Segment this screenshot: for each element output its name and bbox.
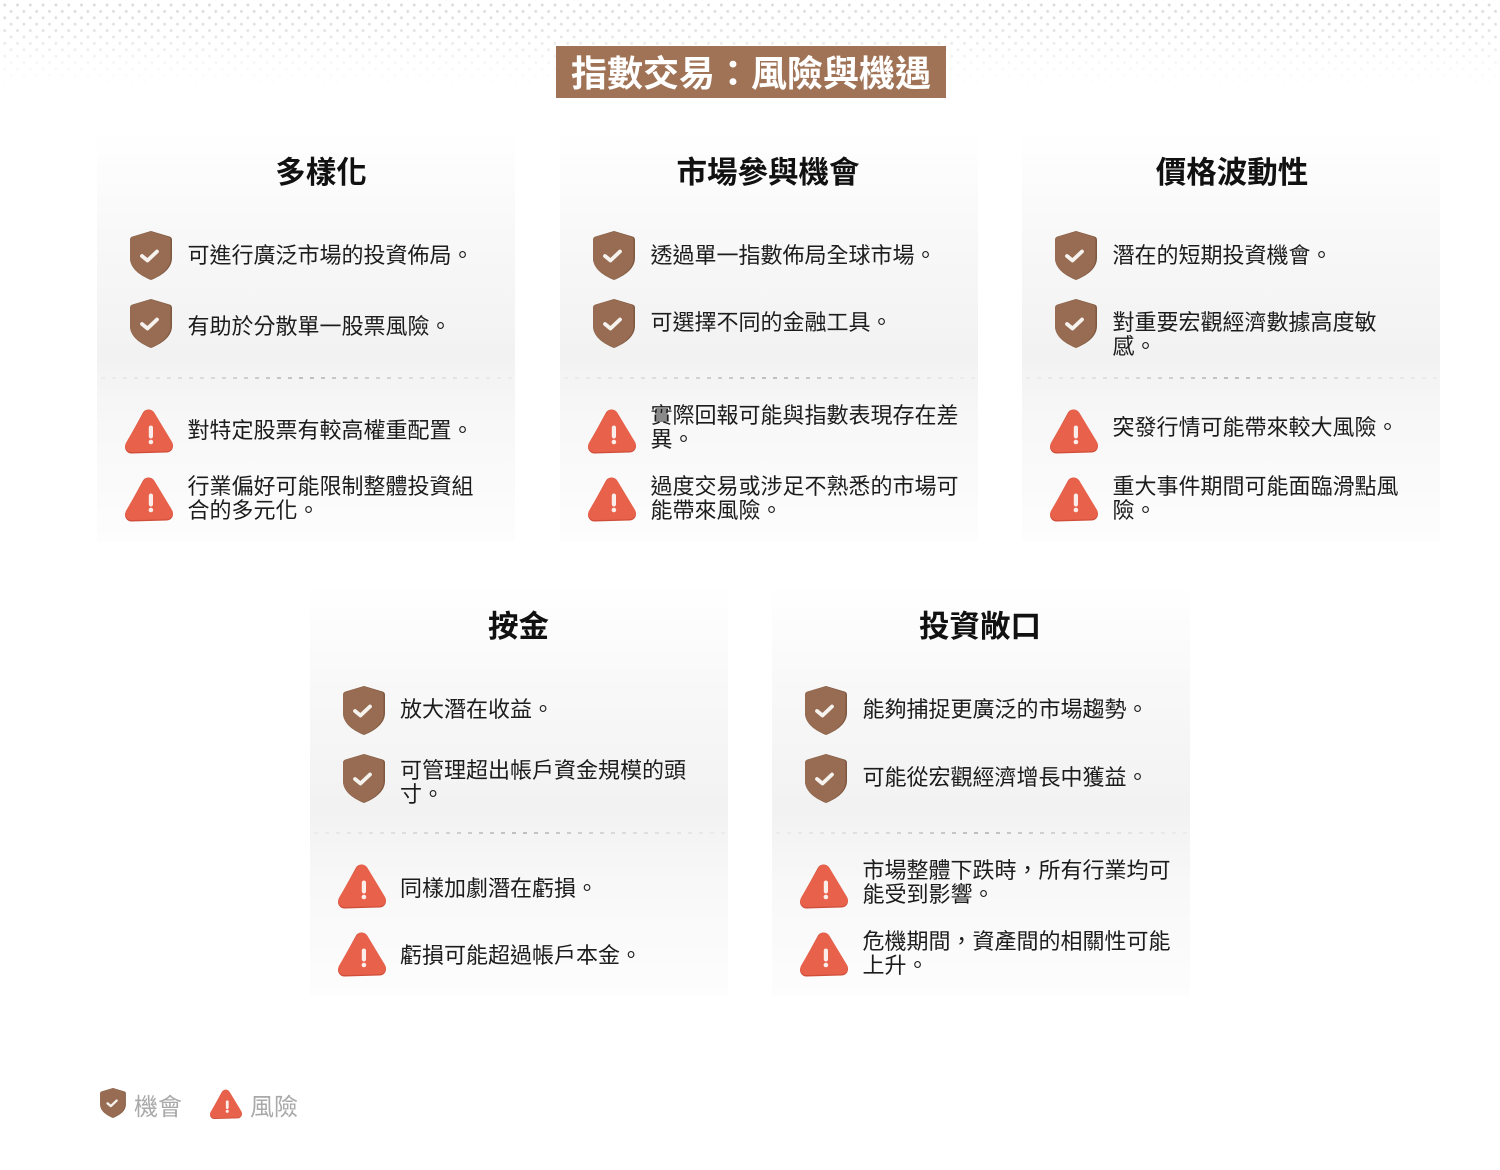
text: risk 2: 行業偏好可能限制整體投資組: [188, 474, 474, 499]
icon: shield: [593, 299, 635, 348]
text: risk 1: 能受到影響。: [862, 882, 995, 907]
text: risk 2: [188, 474, 474, 523]
text: risk 2: 上升。: [862, 953, 929, 978]
icon: warning: [338, 864, 386, 908]
icon: shield: [805, 754, 847, 803]
icon: warning: [588, 410, 636, 454]
text: opportunity 2: [1112, 310, 1377, 359]
text: opportunity 2: 可選擇不同的金融工具。: [650, 310, 893, 335]
text: risk 2: 能帶來風險。: [650, 498, 783, 523]
legend label: opportunity: 機會: [134, 1094, 182, 1121]
icon: shield: [130, 231, 172, 280]
legend icon: warning: [210, 1090, 242, 1119]
panel: 多樣化: [97, 156, 515, 522]
icon: warning: [1050, 478, 1098, 522]
icon: shield: [343, 686, 385, 735]
text: risk 2: 重大事件期間可能面臨滑點風: [1112, 474, 1399, 499]
text: opportunity 1: 能夠捕捉更廣泛的市場趨勢。: [862, 697, 1149, 722]
heading: 投資敞口: [919, 610, 1041, 644]
icon: shield: [1055, 231, 1097, 280]
legend icon: shield: [100, 1088, 126, 1118]
heading: 按金: [488, 610, 549, 644]
text: risk 1: 實際回報可能與指數表現存在差: [650, 403, 959, 428]
text: opportunity 1: 透過單一指數佈局全球市場。: [650, 243, 937, 268]
heading: 多樣化: [275, 156, 367, 190]
icon: warning: [125, 410, 173, 454]
icon: shield: [343, 754, 385, 803]
heading: 市場參與機會: [676, 156, 860, 190]
icon: warning: [800, 864, 848, 908]
icon: shield: [805, 686, 847, 735]
text: opportunity 2: 寸。: [400, 782, 444, 807]
heading: 價格波動性: [1156, 156, 1308, 190]
text: risk 1: [650, 403, 959, 452]
text: risk 1: 突發行情可能帶來較大風險。: [1112, 415, 1399, 440]
text: risk 1: [862, 858, 1171, 907]
text: opportunity 1: 潛在的短期投資機會。: [1112, 243, 1333, 268]
text: risk 1: 對特定股票有較高權重配置。: [188, 418, 474, 443]
icon: warning: [800, 932, 848, 976]
text: risk 2: [650, 474, 959, 523]
text: opportunity 1: 可進行廣泛市場的投資佈局。: [188, 243, 474, 268]
text: risk 2: 險。: [1112, 498, 1157, 523]
text: opportunity 2: [400, 758, 686, 807]
panel: 市場參與機會: [560, 156, 978, 522]
text: risk 2: [1112, 474, 1399, 523]
text: risk 1: 同樣加劇潛在虧損。: [400, 876, 598, 901]
text: opportunity 2: 可能從宏觀經濟增長中獲益。: [862, 765, 1149, 790]
text: risk 2: [862, 929, 1171, 978]
icon: shield: [130, 299, 172, 348]
icon: warning: [588, 478, 636, 522]
text: risk 2: 過度交易或涉足不熟悉的市場可: [650, 474, 959, 499]
text: risk 2: 危機期間，資產間的相關性可能: [862, 929, 1171, 954]
text: opportunity 2: 有助於分散單一股票風險。: [188, 314, 452, 339]
text: risk 1: 異。: [650, 427, 695, 452]
text: opportunity 1: 放大潛在收益。: [400, 697, 554, 722]
text: risk 2: 虧損可能超過帳戶本金。: [400, 943, 642, 968]
panel: 投資敞口: [772, 610, 1190, 976]
text: opportunity 2: 對重要宏觀經濟數據高度敏: [1112, 310, 1377, 335]
icon: warning: [338, 932, 386, 976]
panel: 價格波動性: [1022, 156, 1440, 522]
icon: warning: [1050, 410, 1098, 454]
background dot pattern: [3, 4, 1497, 64]
title: 指數交易：風險與機遇: [571, 53, 931, 94]
legend: [100, 1088, 298, 1121]
text: risk 1: 市場整體下跌時，所有行業均可: [862, 858, 1171, 883]
legend label: risk: 風險: [250, 1094, 298, 1121]
text: opportunity 2: 感。: [1112, 334, 1157, 359]
icon: shield: [1055, 299, 1097, 348]
icon: shield: [593, 231, 635, 280]
text: risk 2: 合的多元化。: [188, 498, 320, 523]
icon: warning: [125, 478, 173, 522]
panel: 按金: [310, 610, 728, 976]
text: opportunity 2: 可管理超出帳戶資金規模的頭: [400, 758, 686, 783]
